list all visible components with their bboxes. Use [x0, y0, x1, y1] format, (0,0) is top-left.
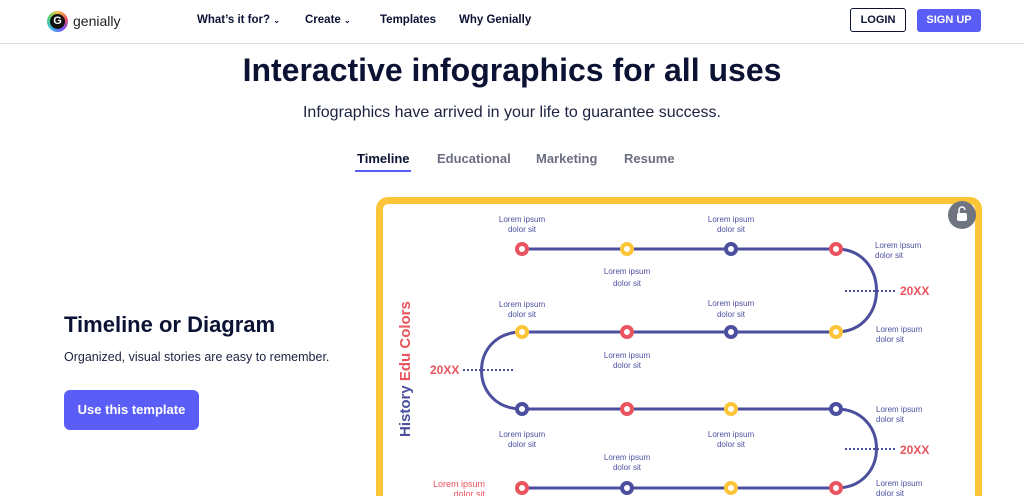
node labels: Lorem ipsum: [604, 267, 650, 276]
year labels: 20XX: [900, 284, 929, 298]
vertical title: History Edu Colors: [397, 301, 414, 437]
node labels: Lorem ipsum: [499, 215, 545, 224]
year labels: 20XX: [900, 443, 929, 457]
node labels: dolor sit: [717, 225, 746, 234]
node labels: dolor sit: [613, 361, 642, 370]
button: use this template: Use this template: [78, 402, 185, 417]
tabs: Educational: [437, 151, 511, 166]
nodes: [517, 244, 841, 493]
subtitle: Infographics have arrived in your life to guarantee success.: [303, 104, 721, 121]
node labels: dolor sit: [717, 310, 746, 319]
node labels: dolor sit: [613, 463, 642, 472]
red label: [433, 479, 485, 496]
infographic panel: dolor sit: [876, 335, 905, 344]
icon: interact: [948, 201, 976, 229]
tabs: [355, 151, 675, 172]
tabs: Marketing: [536, 151, 597, 166]
node labels: dolor sit: [717, 440, 746, 449]
node labels: Lorem ipsum: [604, 453, 650, 462]
login button: LOGIN: [861, 14, 895, 26]
node labels: Lorem ipsum: [499, 430, 545, 439]
logo: G: [53, 15, 62, 27]
tabs: Resume: [624, 151, 675, 166]
tabs: Timeline: [357, 151, 410, 166]
button: use this template: [64, 390, 199, 430]
node labels: dolor sit: [508, 310, 537, 319]
infographic panel: Lorem ipsum: [876, 479, 923, 488]
node labels: Lorem ipsum: [708, 215, 754, 224]
description: Organized, visual stories are easy to remember.: [64, 350, 329, 364]
node labels: Lorem ipsum: [708, 430, 754, 439]
node labels: Lorem ipsum: [708, 299, 754, 308]
infographic panel: [376, 197, 982, 496]
dotted markers: [463, 291, 895, 449]
node labels: Lorem ipsum: [604, 351, 650, 360]
logo: [47, 11, 120, 32]
infographic panel: Lorem ipsum: [876, 405, 923, 414]
sign up button: SIGN UP: [926, 14, 972, 26]
sign up button: [917, 9, 981, 32]
red label: Lorem ipsum: [433, 479, 485, 489]
timeline path: [482, 249, 876, 488]
header: [0, 0, 1024, 44]
header: Create ⌄: [305, 14, 351, 26]
year labels: 20XX: [430, 363, 459, 377]
title: Interactive infographics for all uses: [243, 52, 781, 88]
year labels: [430, 284, 929, 457]
node labels: dolor sit: [613, 279, 642, 288]
node labels: [499, 215, 754, 472]
infographic panel: dolor sit: [875, 251, 904, 260]
infographic panel: Lorem ipsum: [876, 325, 923, 334]
logo: genially: [73, 13, 120, 29]
node labels: Lorem ipsum: [499, 300, 545, 309]
header: Why Genially: [459, 14, 531, 26]
node labels: dolor sit: [508, 225, 537, 234]
header: Templates: [380, 14, 436, 26]
heading: Timeline or Diagram: Timeline or Diagram: [64, 312, 275, 337]
node labels: dolor sit: [508, 440, 537, 449]
infographic panel: dolor sit: [876, 415, 905, 424]
infographic panel: Lorem ipsum: [875, 241, 922, 250]
login button: [850, 8, 906, 32]
nav links: What’s it for? ⌄: [197, 14, 280, 26]
